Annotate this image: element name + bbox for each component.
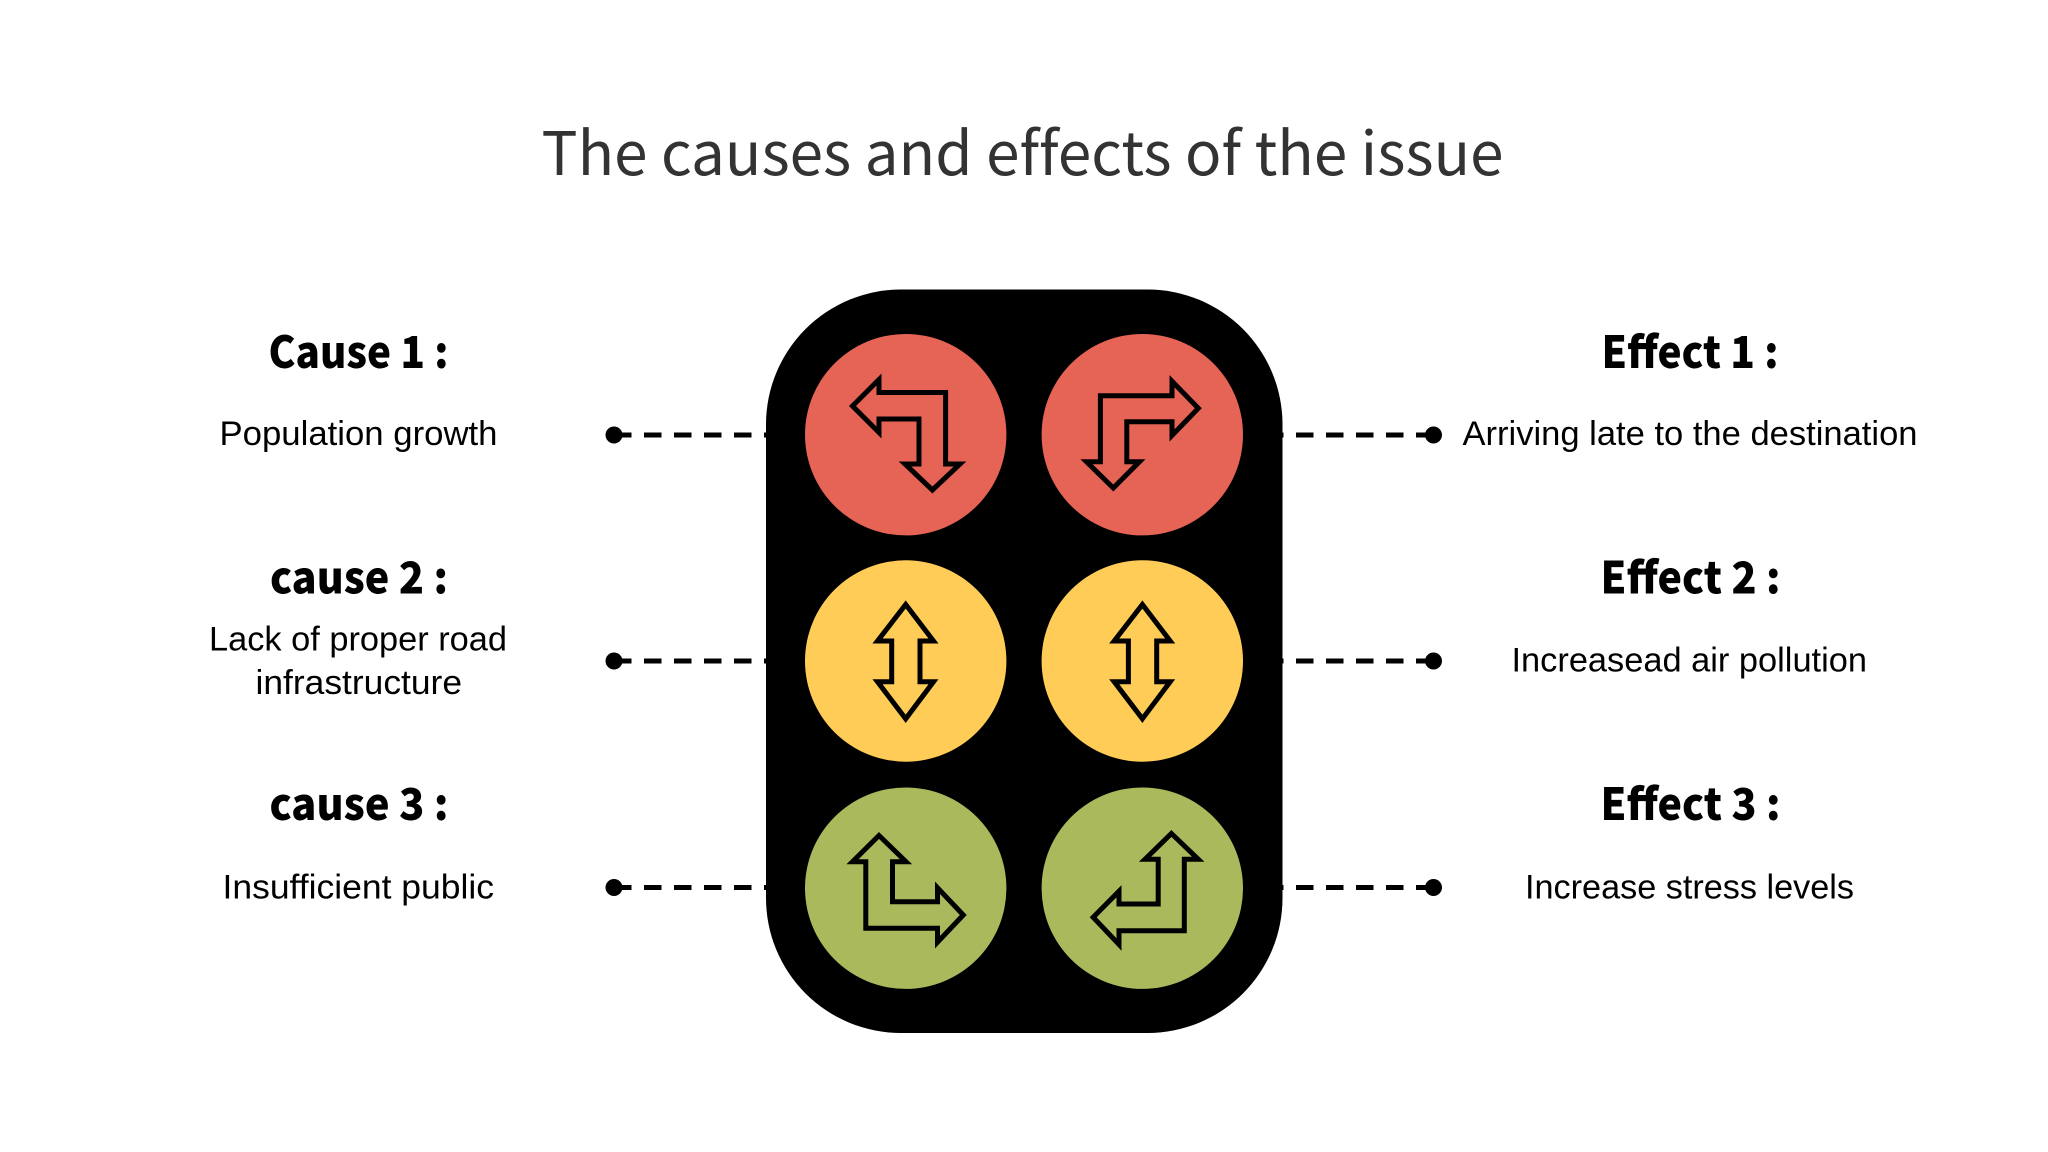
description: effect 3: Increase stress levels	[1525, 868, 1854, 906]
light: green right with arrow	[1042, 788, 1243, 989]
heading: cause 2: cause 2 :	[270, 542, 448, 606]
heading: cause 3: cause 3 :	[270, 769, 448, 833]
panel: traffic light	[766, 290, 1282, 1033]
connector: effect 2	[1278, 652, 1442, 670]
text block: cause 1	[220, 317, 498, 453]
heading: effect 2: Effect 2 :	[1600, 542, 1780, 606]
connector: effect 1	[1278, 426, 1442, 444]
connector: cause 1	[606, 426, 770, 444]
text block: cause 3	[222, 769, 494, 906]
text block: effect 3	[1525, 769, 1854, 906]
text block: effect 2	[1512, 542, 1867, 680]
light: yellow left with arrow	[805, 560, 1006, 762]
description: cause 1: Population growth	[220, 415, 498, 453]
light: yellow right with arrow	[1042, 560, 1243, 762]
description: effect 1: Arriving late to the destination	[1462, 415, 1918, 453]
heading: effect 1: Effect 1 :	[1602, 317, 1778, 381]
heading: effect 3: Effect 3 :	[1600, 769, 1780, 833]
heading: cause 1: Cause 1 :	[268, 317, 448, 381]
traffic light housing	[766, 290, 1282, 1033]
connector: cause 3	[606, 879, 770, 896]
connector: effect 3	[1278, 879, 1442, 896]
description: cause 2	[209, 621, 507, 702]
description: cause 3: Insufficient public	[222, 868, 494, 906]
connector: cause 2	[606, 652, 770, 670]
description: cause 2: infrastructure	[256, 664, 462, 702]
light: green left with arrow	[805, 788, 1006, 989]
text block: cause 2	[209, 542, 507, 702]
description: effect 2: Increasead air pollution	[1512, 642, 1867, 680]
description: cause 2: Lack of proper road	[209, 621, 507, 659]
text block: effect 1	[1462, 317, 1918, 453]
title: The causes and effects of the issue	[542, 106, 1504, 193]
light: red right with arrow	[1042, 334, 1243, 535]
light: red left with arrow	[805, 334, 1006, 535]
